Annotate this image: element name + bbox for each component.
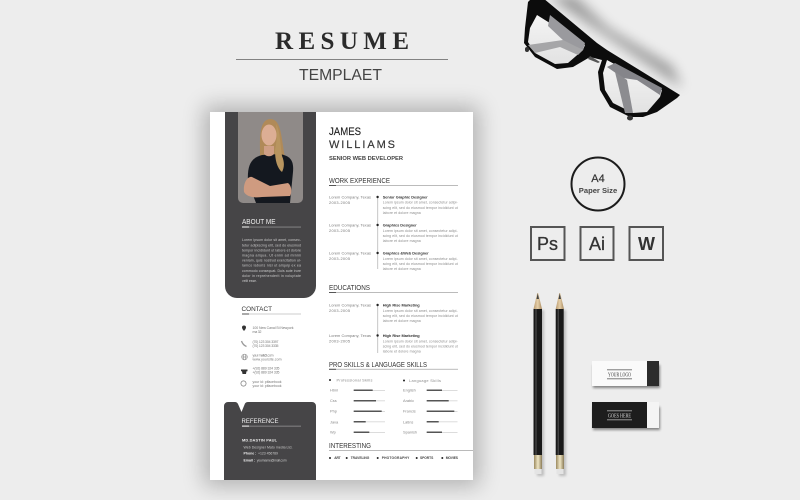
about me text: dolor in reprehenderit in voluptate (242, 274, 301, 278)
paper shadow (204, 106, 479, 486)
language skills chart: English (403, 388, 416, 392)
title: resume: TEMPLAET (299, 67, 382, 84)
heading: about me: ABOUT ME (242, 219, 276, 226)
fax numbers: +(92) 889 324 335 (252, 370, 280, 374)
web details: www.yoursite.com (252, 358, 282, 362)
about me text: velit esse. (242, 279, 257, 283)
fax numbers (252, 366, 280, 374)
reference contact: Phone : (244, 452, 256, 456)
icon: location (242, 326, 246, 331)
timeline (376, 196, 379, 269)
heading: contact: CONTACT (242, 306, 272, 313)
interest list (329, 456, 459, 460)
job 2: labore et dolore magna (383, 239, 421, 243)
reference contact: yourname@mail.com (257, 458, 287, 462)
heading: educations: EDUCATIONS (329, 283, 370, 292)
heading: skills: PRO SKILLS & LANGUAGE SKILLS (329, 360, 427, 369)
icon: photoshop: Ps (537, 234, 558, 254)
address (252, 326, 294, 334)
education 1 (329, 302, 459, 323)
icon: word: W (638, 234, 655, 254)
panel: reference (224, 402, 316, 480)
glasses (524, 0, 682, 120)
job 1: Lorem Company, Texas (329, 194, 371, 200)
professional skills chart: Wp (330, 430, 336, 434)
education 2: scing elit, sed do eiusmod tempor incididunt ut (383, 344, 458, 348)
about me text: lamco laboris nisi ut aliquip ex ea (242, 264, 301, 268)
professional skills chart: Professional Skills (336, 378, 373, 382)
language skills chart (403, 378, 458, 434)
resume page (210, 112, 473, 480)
language skills chart: Francis (403, 408, 416, 414)
education 1: scing elit, sed do eiusmod tempor incididunt ut (383, 314, 458, 318)
icon: telephone (241, 370, 248, 374)
address: 100 New Canal St Newyork (252, 326, 294, 330)
eraser: your logo: YOUR LOGO (608, 372, 631, 378)
education 2: Lorem ipsum dolor sit amet, consectetur adipi- (383, 340, 459, 344)
section: skills (329, 360, 458, 434)
language skills chart: Latins (403, 420, 413, 424)
icon: globe (242, 354, 247, 360)
icon: phone (242, 341, 246, 346)
social accounts (252, 380, 282, 388)
job 1: Lorem ipsum dolor sit amet, consectetur adipi- (383, 200, 459, 204)
phone numbers (252, 340, 279, 348)
language skills chart: Arabic (403, 398, 414, 403)
pencil 2 (556, 293, 566, 476)
professional skills chart: Html (330, 388, 338, 392)
eraser: goes here: GOES HERE (608, 414, 631, 420)
panel: contact (241, 306, 301, 388)
job 2: Lorem ipsum dolor sit amet, consectetur adipi- (383, 229, 459, 233)
education 2: Lorem Company, Texas (329, 333, 371, 338)
education 2: High Rise Marketing (383, 333, 420, 338)
education 1: 2003-2005 (329, 308, 350, 313)
title: resume (236, 28, 448, 84)
language skills chart: Spanish (403, 430, 417, 434)
education 1: Lorem Company, Texas (329, 302, 371, 308)
reference contact (242, 438, 293, 462)
job 1: labore et dolore magna (383, 211, 421, 215)
icon: illustrator: Ai (589, 234, 605, 254)
header: name (329, 126, 404, 162)
reference contact: Email : (244, 458, 255, 462)
icon: social (241, 381, 246, 386)
professional skills chart: Css (330, 398, 337, 403)
education 2: 2003-2005 (329, 338, 350, 344)
education 1: Lorem ipsum dolor sit amet, consectetur adipi- (383, 309, 459, 313)
header: name: JAMES (329, 126, 361, 138)
job 3: Lorem Company, Texas (329, 250, 371, 256)
reference contact: Web Designer Mato media Ltd. (244, 446, 293, 450)
badge: A4 paper size: Paper Size (579, 186, 617, 195)
interest list: ART (334, 456, 341, 460)
education 2: labore et dolore magna (383, 350, 421, 354)
section: work experience (329, 176, 459, 271)
badge: A4 paper size (572, 158, 624, 210)
job 1: 2003-2005 (329, 200, 350, 205)
job 1: scing elit, sed do eiusmod tempor incididunt ut (383, 206, 458, 210)
reference contact: MD.DASTIN PAUL (242, 438, 278, 442)
professional skills chart: Java (330, 420, 339, 424)
about me text: tempor incididunt ut labore et dolore (242, 248, 301, 252)
section: interesting (329, 441, 473, 460)
phone numbers: (70) 123 304 3397 (252, 340, 279, 344)
pencil 1 (534, 293, 544, 476)
language skills chart: Language Skills (409, 378, 441, 383)
header: name: SENIOR WEB DEVELOPER (329, 156, 404, 162)
heading: work experience: WORK EXPERIENCE (329, 176, 390, 185)
education 1: High Rise Marketing (383, 302, 420, 308)
job 2 (329, 222, 459, 243)
panel: profile (225, 112, 316, 298)
address: ma 32 (252, 330, 262, 334)
heading: interesting: INTERESTING (329, 441, 371, 450)
job 1: Senior Graphic Designer (383, 194, 428, 200)
interest list: SPORTS (420, 456, 434, 460)
job 3: scing elit, sed do eiusmod tempor incididunt ut (383, 262, 458, 266)
eraser: goes here (592, 402, 660, 430)
title: resume: RESUME (275, 28, 409, 55)
timeline (376, 304, 379, 353)
social accounts: your id: pifacebook (252, 380, 282, 384)
education 1: labore et dolore magna (383, 319, 421, 323)
job 3: Lorem ipsum dolor sit amet, consectetur adipi- (383, 257, 459, 261)
about me text (242, 238, 302, 283)
professional skills chart (329, 378, 385, 434)
icon: illustrator (580, 227, 614, 260)
job 2: Graphics Designer (383, 222, 417, 228)
interest list: MOVIES (446, 456, 459, 460)
interest list: PHOTOGRAPHY (382, 456, 410, 460)
icon: photoshop (531, 227, 564, 260)
job 3 (329, 250, 459, 271)
heading: reference: REFERENCE (242, 418, 279, 425)
job 3: labore et dolore magna (383, 267, 421, 271)
job 2: Lorem Company, Texas (329, 222, 371, 228)
interest list: TRAVELING (351, 456, 370, 460)
phone numbers: (70) 123 304 3335 (252, 344, 279, 348)
job 1 (329, 194, 459, 215)
job 2: scing elit, sed do eiusmod tempor incididunt ut (383, 234, 458, 238)
about me text: veniam, quis nostrud exercitation ul- (242, 259, 302, 263)
job 3: Graphics &Web Designer (383, 250, 429, 256)
professional skills chart: Php (330, 408, 337, 414)
about me text: commodo consequat. Duis aute irure (242, 269, 301, 273)
icon: word (630, 227, 663, 260)
web details (252, 354, 282, 362)
education 2 (329, 333, 459, 354)
badge: A4 paper size: A4 (591, 173, 605, 185)
photo of woman (238, 112, 303, 203)
header: name: WILLIAMS (329, 139, 395, 151)
job 2: 2003-2005 (329, 228, 350, 233)
reference contact: +123 456789 (258, 452, 278, 456)
about me text: magna aliqua. Ut enim ad minim (242, 254, 301, 258)
eraser: your logo (592, 361, 660, 388)
about me text: tetur adipiscing elit, sed do eiusmod (242, 243, 301, 247)
about me text: Lorem ipsum dolor sit amet, consec- (242, 238, 302, 242)
job 3: 2003-2005 (329, 256, 350, 261)
web details: your mail@.com (252, 354, 274, 358)
section: educations (329, 283, 459, 354)
social accounts: your id: pifacebook (252, 384, 282, 388)
fax numbers: +(92) 889 324 335 (252, 366, 280, 370)
